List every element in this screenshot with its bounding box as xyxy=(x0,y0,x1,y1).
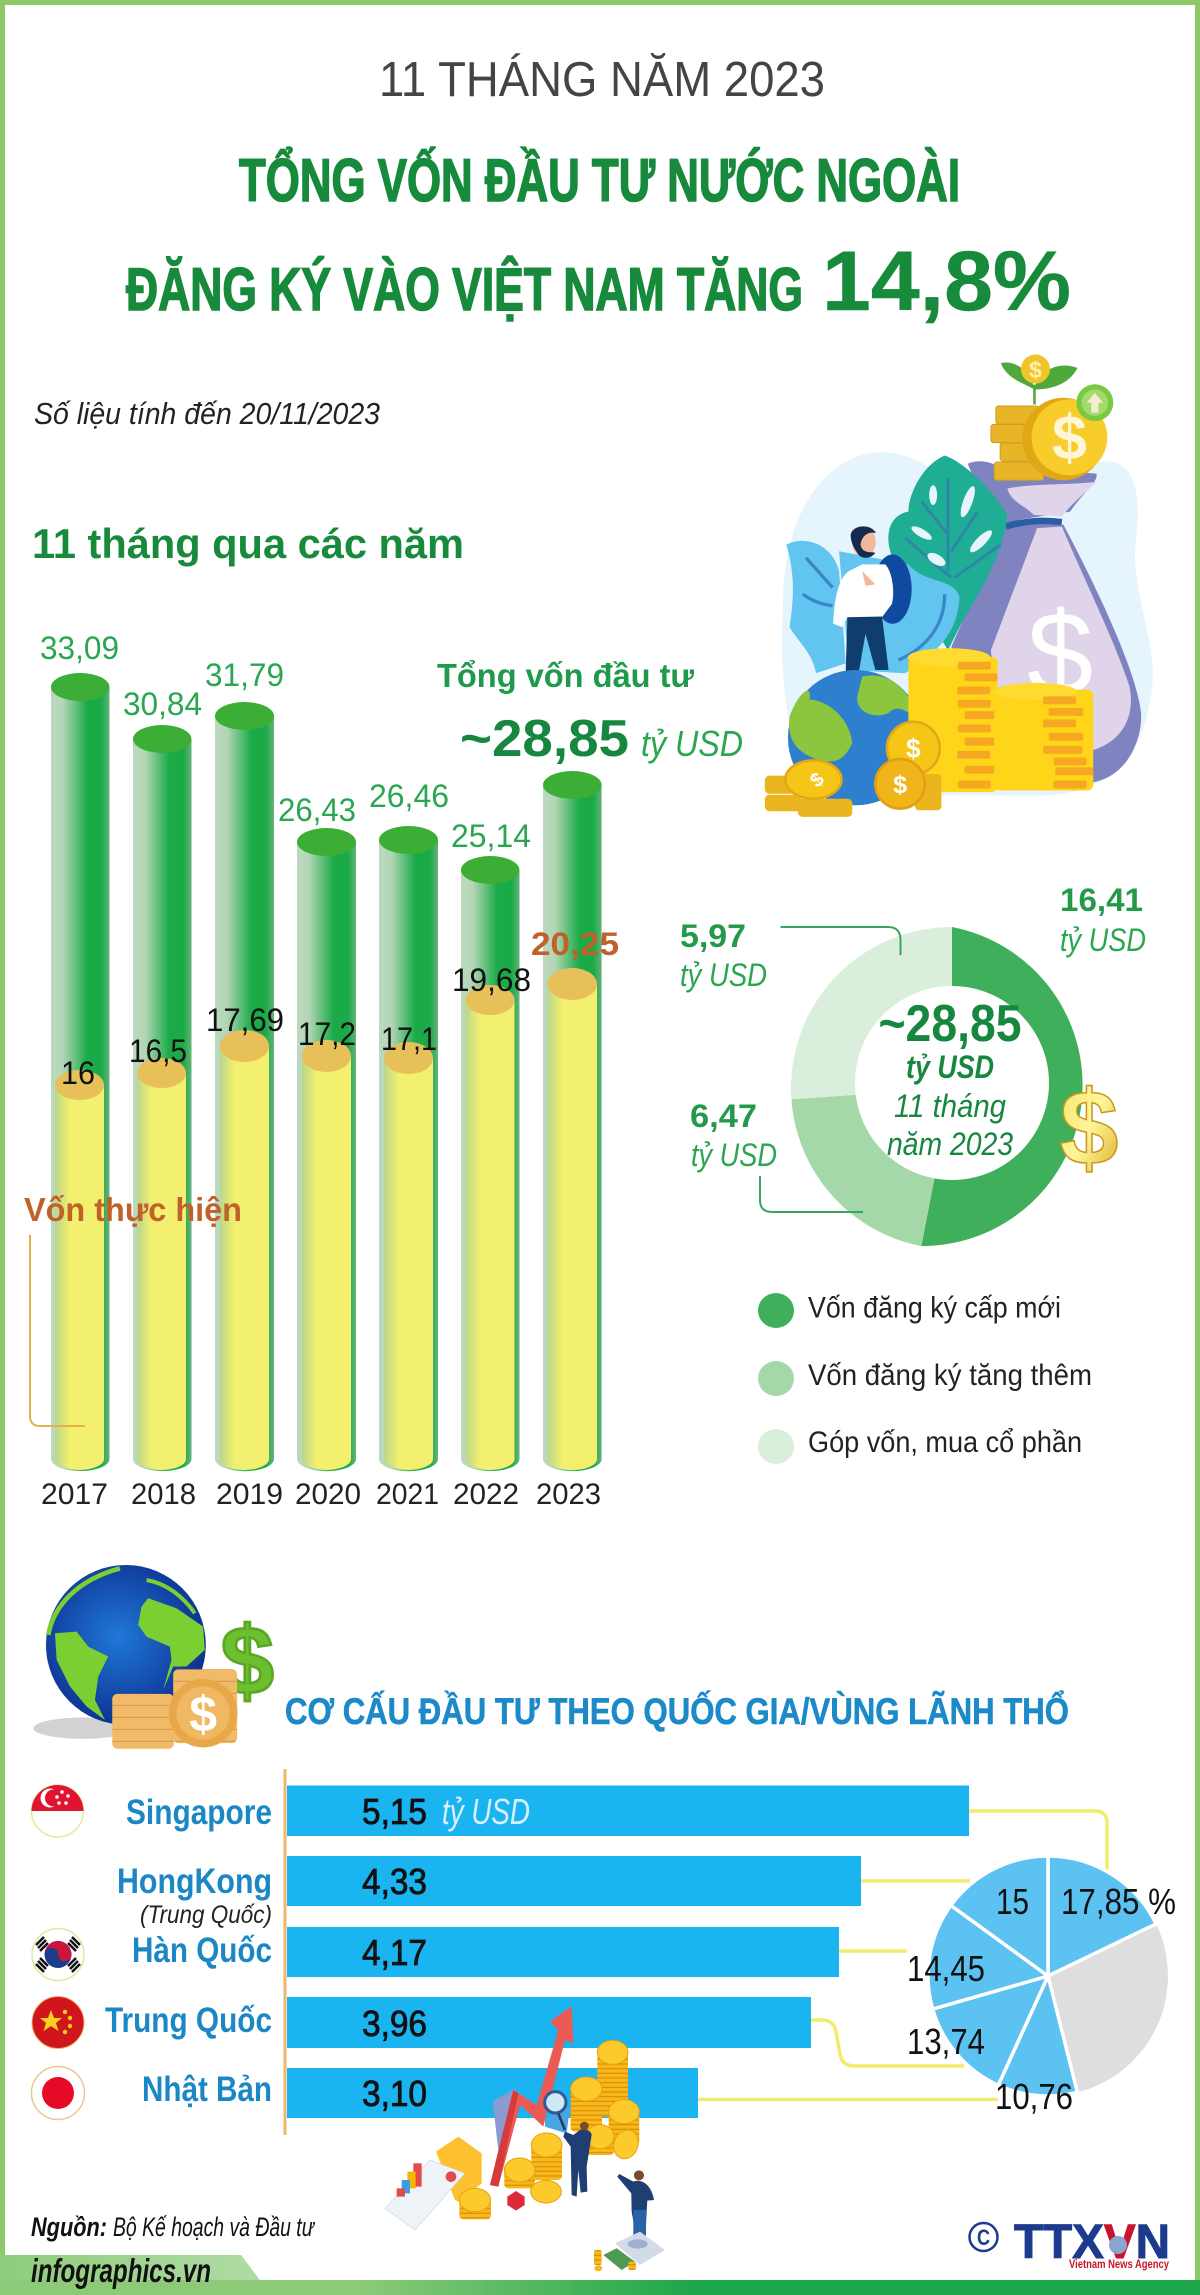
disbursed capital values: 20,25 xyxy=(531,926,619,962)
year labels: 2018 xyxy=(131,1478,196,1511)
donut legend: Vốn đăng ký cấp mới xyxy=(808,1292,1061,1324)
pie labels: 15 xyxy=(996,1881,1029,1922)
label: disbursed capital: Vốn thực hiện xyxy=(24,1191,242,1228)
total capital values: 33,09 xyxy=(40,630,119,666)
logo: TTXVN: Vietnam News Agency xyxy=(1069,2257,1169,2271)
pie labels: 13,74 xyxy=(907,2021,985,2062)
illustration: rising arrow, coins and businessmen xyxy=(385,2006,665,2271)
donut label: 16,41: tỷ USD xyxy=(1060,922,1146,958)
connectors to pie chart xyxy=(698,1811,1107,2100)
disbursed capital values: 17,2 xyxy=(298,1016,356,1052)
year labels: 2023 xyxy=(536,1478,601,1511)
bar: South Korea: 4,17 xyxy=(362,1932,427,1973)
bar: Japan: 3,10 xyxy=(362,2073,427,2114)
bar: Singapore xyxy=(287,1786,969,1836)
bar 2021 xyxy=(379,826,438,1471)
total capital values: 30,84 xyxy=(123,686,202,722)
year labels: 2017 xyxy=(41,1478,108,1511)
illustration: money bag, investor, globe and coins: $ xyxy=(1027,588,1093,721)
website: infographics.vn xyxy=(31,2252,211,2289)
title: 14,8% xyxy=(822,234,1071,328)
bar: Hong Kong: 4,33 xyxy=(362,1861,427,1902)
year labels: 2020 xyxy=(295,1478,361,1511)
disbursed capital values: 17,69 xyxy=(206,1002,284,1038)
flag: China xyxy=(32,1996,84,2048)
flag: South Korea xyxy=(32,1928,84,1980)
country labels: Hàn Quốc xyxy=(132,1931,272,1970)
label: disbursed capital xyxy=(24,1191,242,1426)
section heading: investment structure: CƠ CẤU ĐẦU TƯ THEO QUỐC GIA/VÙNG LÃNH THỔ xyxy=(285,1689,1069,1732)
country labels: (Trung Quốc) xyxy=(140,1901,272,1929)
title: ĐĂNG KÝ VÀO VIỆT NAM TĂNG xyxy=(126,256,803,323)
callout: total investment capital xyxy=(437,657,743,768)
title: TỔNG VỐN ĐẦU TƯ NƯỚC NGOÀI xyxy=(239,147,960,214)
donut label: 6,47 with connector xyxy=(690,1098,863,1212)
slice: additional capital xyxy=(791,1088,952,1246)
callout: total investment capital: ~28,85 xyxy=(460,710,629,768)
donut centre total: ~28,85 xyxy=(878,995,1022,1053)
donut label: 5,97 with connector: tỷ USD xyxy=(680,957,767,993)
total capital values: 26,43 xyxy=(278,792,356,828)
bar: Japan xyxy=(287,2068,698,2118)
country labels: Trung Quốc xyxy=(105,2001,272,2040)
icon: globe with coins: $ xyxy=(220,1608,274,1715)
source: Nguồn: xyxy=(31,2212,107,2242)
donut label: 5,97 with connector: 5,97 xyxy=(680,918,746,954)
disbursed capital values: 19,68 xyxy=(452,962,531,998)
donut centre total: năm 2023 xyxy=(887,1126,1013,1162)
slice: new registered capital xyxy=(921,927,1083,1246)
donut chart xyxy=(791,927,1118,1246)
illustration: money bag, investor, globe and coins: $ xyxy=(1052,403,1087,473)
donut centre total xyxy=(878,995,1022,1162)
country labels: Nhật Bản xyxy=(142,2070,272,2109)
year labels: 2021 xyxy=(376,1478,439,1511)
country labels xyxy=(105,1793,272,2109)
bottom bar xyxy=(0,2255,1200,2295)
callout: total investment capital: tỷ USD xyxy=(641,723,743,764)
pie labels: 17,85 % xyxy=(1061,1881,1176,1922)
icon: globe with coins: $ xyxy=(189,1686,217,1742)
slice: capital contribution xyxy=(791,927,952,1099)
icon: gold dollar: $ xyxy=(1060,1069,1118,1187)
year labels xyxy=(41,1478,601,1511)
illustration: money bag, investor, globe and coins xyxy=(765,355,1153,817)
bar: Hong Kong xyxy=(287,1856,861,1906)
donut label: 6,47 with connector: tỷ USD xyxy=(691,1137,777,1173)
flag: Singapore xyxy=(32,1785,84,1837)
bar 2023 xyxy=(543,771,602,1471)
donut centre total: tỷ USD xyxy=(906,1049,994,1085)
pie labels: 10,76 xyxy=(995,2076,1073,2117)
donut legend: Góp vốn, mua cổ phần xyxy=(808,1426,1082,1459)
illustration: money bag, investor, globe and coins: $ xyxy=(906,733,921,763)
year labels: 2022 xyxy=(453,1478,519,1511)
chart: annual cylinders xyxy=(40,630,619,1511)
disbursed capital values xyxy=(61,926,619,1091)
icon: globe with coins xyxy=(33,1565,274,1749)
year labels: 2019 xyxy=(216,1478,283,1511)
bar: South Korea xyxy=(287,1927,839,1977)
logo: TTXVN: TTXVN xyxy=(1014,2216,1170,2269)
total capital values xyxy=(40,630,531,854)
donut label: 6,47 with connector: 6,47 xyxy=(690,1098,757,1134)
total capital values: 31,79 xyxy=(205,657,284,693)
section heading: 11 months: 11 tháng qua các năm xyxy=(32,520,464,567)
title xyxy=(126,147,1071,328)
bar: Singapore: tỷ USD xyxy=(442,1791,530,1832)
pie labels: 14,45 xyxy=(907,1948,985,1989)
illustration: money bag, investor, globe and coins: $ xyxy=(1029,357,1042,383)
total capital values: 25,14 xyxy=(451,818,531,854)
illustration: money bag, investor, globe and coins: $ xyxy=(893,771,907,799)
callout: total investment capital: Tổng vốn đầu tư xyxy=(437,657,694,694)
donut centre total: 11 tháng xyxy=(894,1088,1006,1124)
disbursed capital values: 17,1 xyxy=(381,1021,437,1057)
donut legend: Vốn đăng ký tăng thêm xyxy=(808,1359,1092,1392)
bar 2020 xyxy=(297,828,356,1471)
bar 2019 xyxy=(215,702,274,1471)
bar: Singapore: 5,15 xyxy=(362,1791,427,1832)
data date note: Số liệu tính đến 20/11/2023 xyxy=(34,396,380,431)
donut legend xyxy=(758,1292,1092,1464)
bar 2018 xyxy=(133,725,192,1471)
country labels: HongKong xyxy=(117,1862,272,1901)
bar 2017 xyxy=(51,673,110,1471)
flag: Japan xyxy=(32,2066,84,2120)
bar: China xyxy=(287,1997,811,2048)
country labels: Singapore xyxy=(126,1793,272,1832)
donut label: 16,41 xyxy=(1060,882,1146,958)
bar chart: countries xyxy=(287,1786,969,2118)
disbursed capital values: 16 xyxy=(61,1055,95,1091)
donut label: 16,41: 16,41 xyxy=(1060,882,1143,918)
illustration: money bag, investor, globe and coins: $ xyxy=(806,768,829,792)
pie chart xyxy=(907,1856,1176,2117)
disbursed capital values: 16,5 xyxy=(129,1033,187,1069)
source: Bộ Kế hoạch và Đầu tư xyxy=(113,2212,315,2242)
bar: China: 3,96 xyxy=(362,2003,427,2044)
subtitle: 11 THÁNG NĂM 2023 xyxy=(379,53,825,107)
donut label: 5,97 with connector xyxy=(680,918,900,993)
axis line xyxy=(284,1769,286,2135)
logo: TTXVN: C xyxy=(977,2225,990,2250)
bar 2022 xyxy=(461,856,520,1471)
pie labels xyxy=(907,1881,1176,2117)
total capital values: 26,46 xyxy=(369,778,449,814)
